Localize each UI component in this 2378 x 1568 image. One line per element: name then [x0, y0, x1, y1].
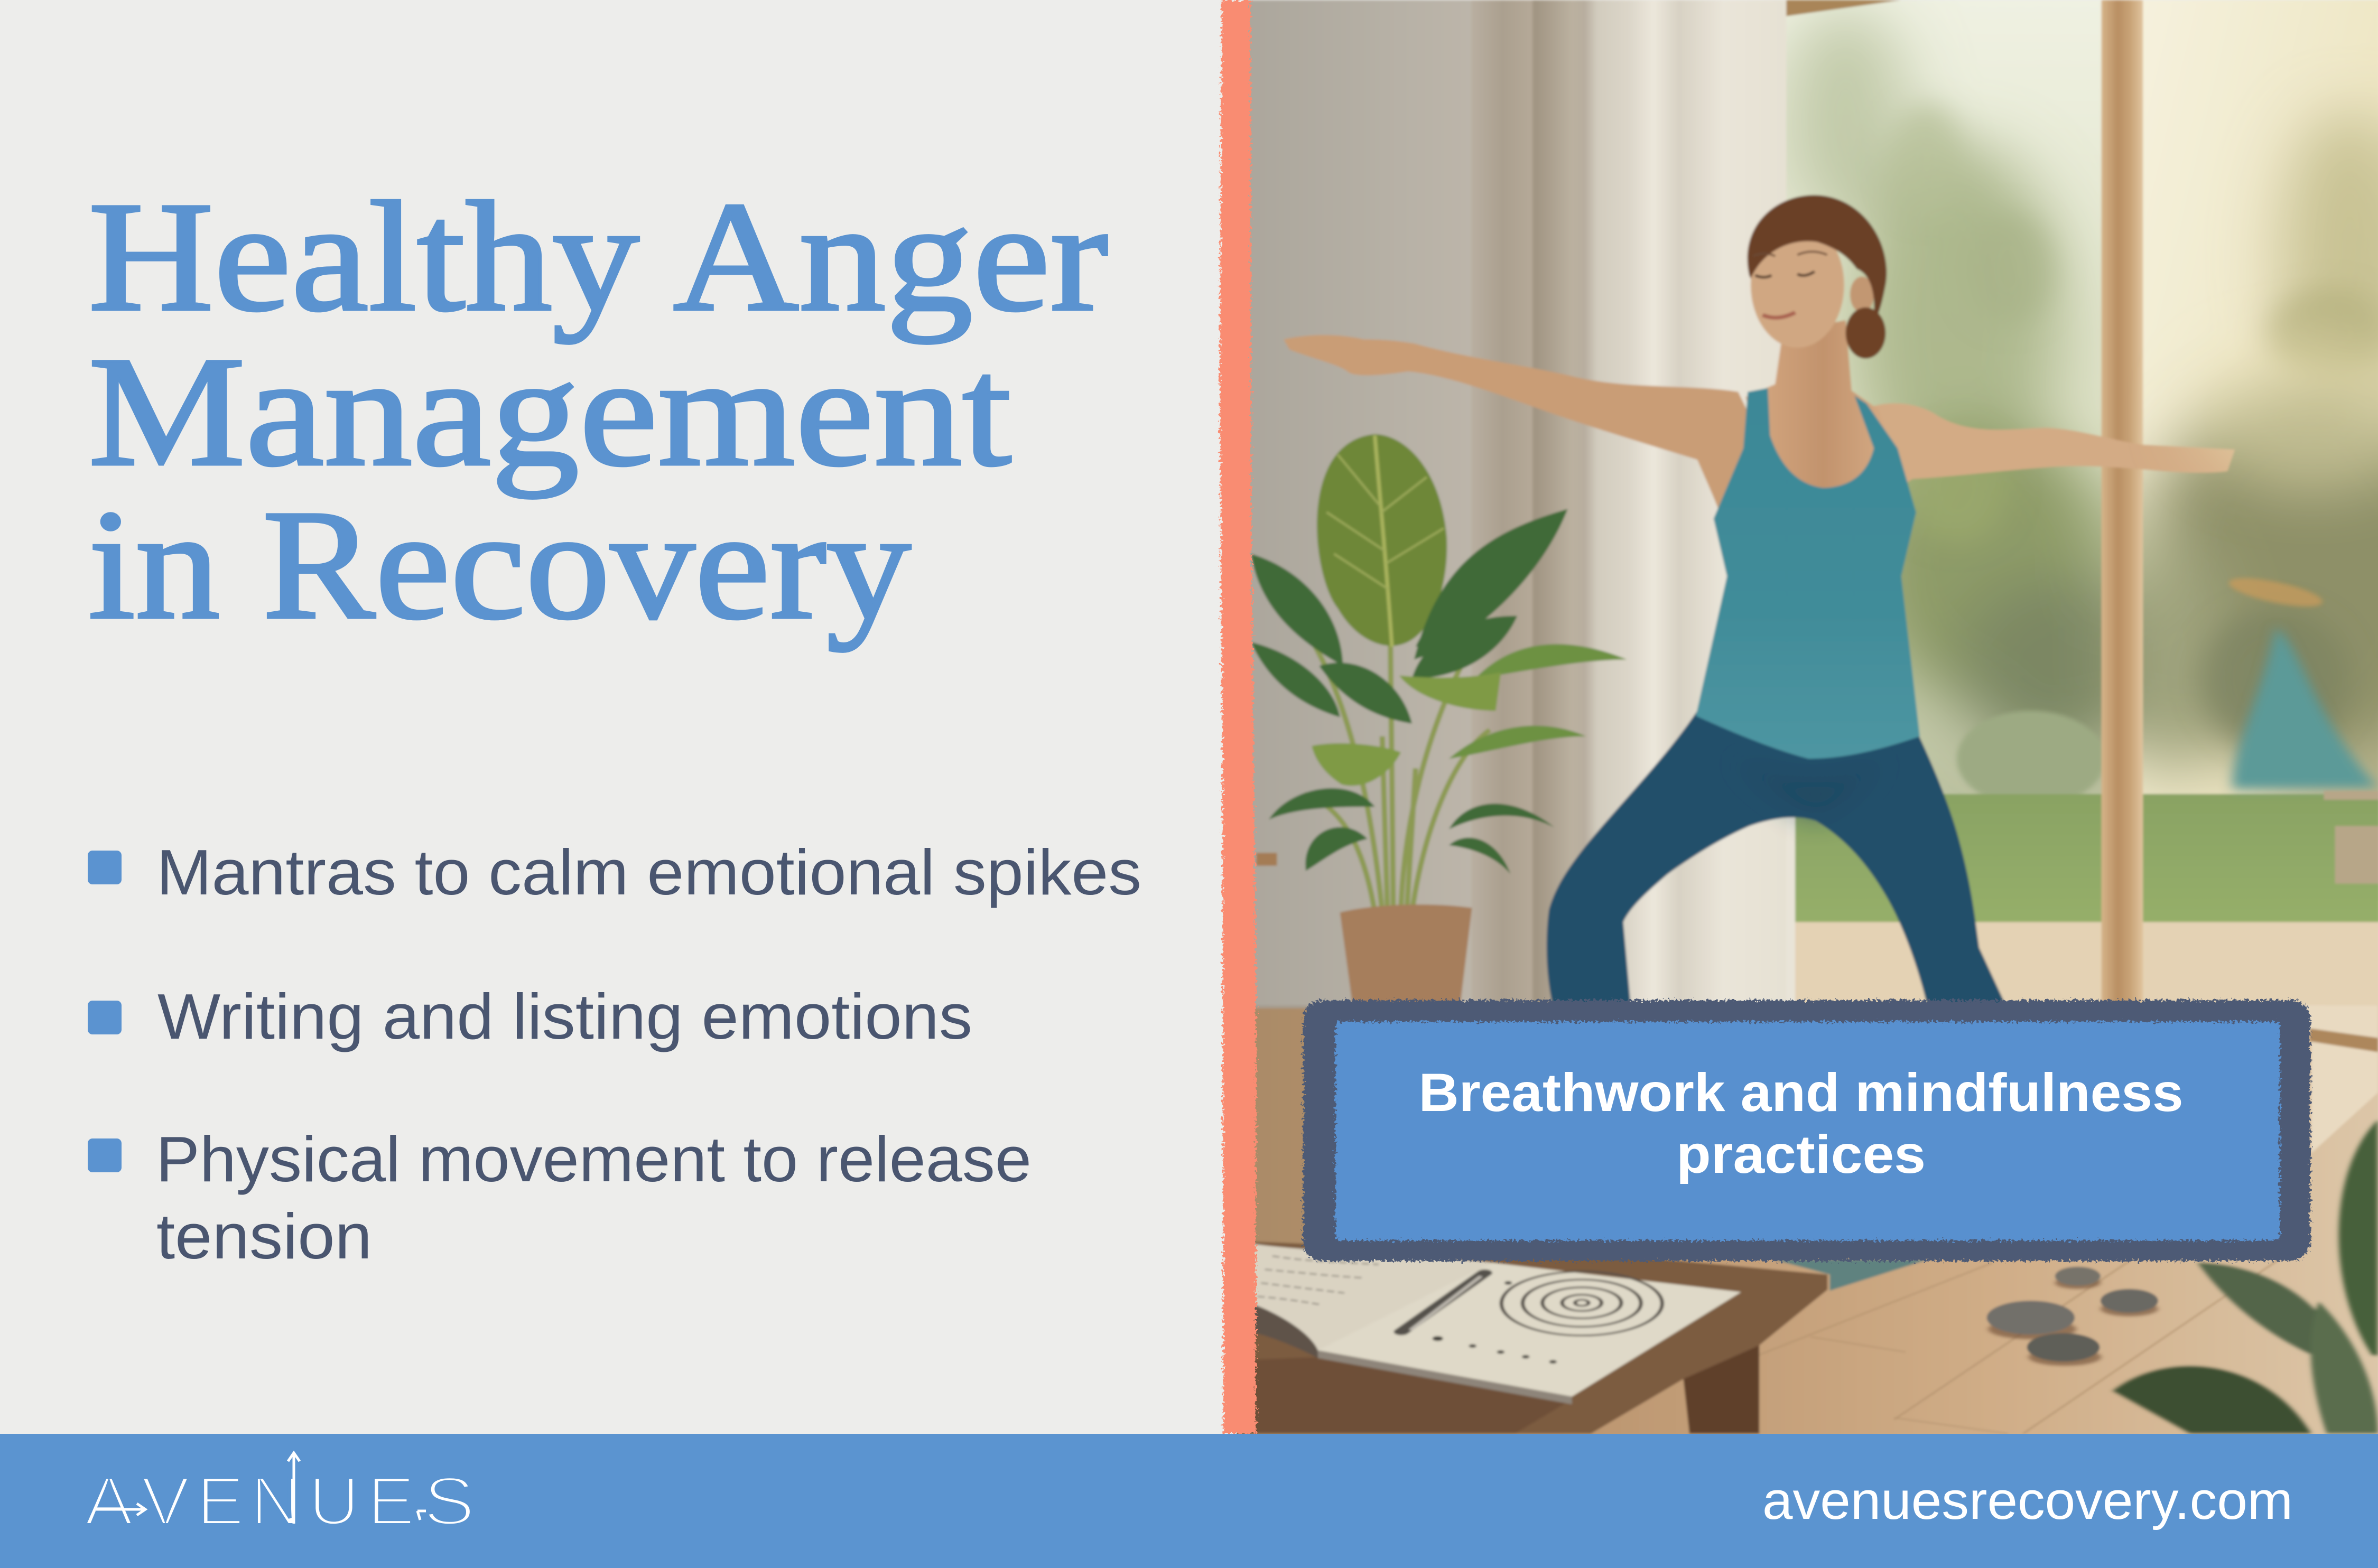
- mid green leaves: [1312, 644, 1627, 786]
- callout text: practices: [1676, 1124, 1926, 1184]
- callout blue panel: [1335, 1022, 2280, 1240]
- wicker pot: [1340, 904, 1472, 1005]
- left arm: [1284, 335, 1753, 512]
- dots: [1433, 1281, 1557, 1364]
- trees outside the window: [1786, 6, 2378, 781]
- right arm: [1872, 404, 2235, 487]
- window glow: [2194, 339, 2378, 493]
- stones: [1987, 1267, 2158, 1366]
- table: [1234, 1241, 1827, 1434]
- logo: AVENUES: U: [309, 1462, 359, 1539]
- title: Management: [88, 324, 1012, 499]
- stems: [1304, 640, 1490, 912]
- bullet 2: Writing and listing emotions: [157, 981, 972, 1052]
- yoga mat edge: [1773, 1259, 1928, 1291]
- garden bench: [2324, 791, 2378, 884]
- bullet 3: [88, 1123, 1032, 1272]
- logo arrows: [96, 1453, 426, 1524]
- hair bun: [1846, 307, 1885, 359]
- logo: AVENUES: E: [197, 1462, 244, 1539]
- window top beam: [1782, 0, 1901, 17]
- window left pane: [1779, 0, 2105, 1005]
- logo: AVENUES: [85, 1453, 475, 1539]
- neck and chest: [1745, 320, 1901, 493]
- hair: [1748, 195, 1887, 320]
- leggings shadow: [1734, 755, 1883, 821]
- terrace: [1794, 922, 2378, 1005]
- ear: [1850, 277, 1874, 312]
- logo: AVENUES: N: [250, 1462, 301, 1539]
- bullet 3: tension: [156, 1200, 372, 1272]
- curtains: [1471, 0, 1786, 1005]
- upper room: [1245, 0, 2378, 1005]
- photo: woman doing yoga by a window: [1234, 0, 2378, 1436]
- title: [88, 170, 1108, 652]
- target circles: [1501, 1272, 1662, 1336]
- window frame: [2102, 0, 2143, 1005]
- callout dark border: [1303, 1000, 2310, 1261]
- blue garden sculpture: [2233, 628, 2378, 789]
- head: [1751, 222, 1844, 348]
- window frame bottom corner: [2310, 1029, 2378, 1052]
- lawn: [1794, 794, 2378, 933]
- wall: [1245, 0, 1482, 1005]
- footer bar: [0, 1434, 2378, 1568]
- handwriting on left page: [1257, 1256, 1379, 1305]
- title: in Recovery: [88, 478, 911, 652]
- pen: [1401, 1273, 1485, 1332]
- logo: AVENUES: S: [423, 1462, 475, 1539]
- bright terrace floor: [1796, 951, 2378, 1153]
- woman: [1284, 195, 2235, 1005]
- teal tank top: [1696, 388, 1920, 759]
- foreground plant: [2113, 1119, 2378, 1434]
- tree foliage patches: [1890, 102, 2378, 749]
- bullet list: [88, 836, 1141, 1272]
- logo: AVENUES: A: [85, 1462, 133, 1539]
- closed eyes and mouth: [1753, 251, 1827, 318]
- logo: AVENUES: E: [367, 1462, 415, 1539]
- window right pane: [2142, 0, 2378, 1005]
- logo: AVENUES: V: [141, 1462, 190, 1539]
- wall bottom: [1234, 951, 1344, 1008]
- shrub: [1957, 711, 2105, 807]
- salmon edge strip: [1220, 0, 1256, 1434]
- website url: avenuesrecovery.com: [1762, 1471, 2293, 1530]
- left panel background: [0, 0, 1237, 1434]
- callout text: Breathwork and mindfulness: [1418, 1062, 2184, 1123]
- large leaf: [1317, 434, 1447, 646]
- dark leaves: [1251, 509, 1567, 874]
- bullet 1: Mantras to calm emotional spikes: [156, 836, 1141, 908]
- bullet 3: Physical movement to release: [156, 1123, 1032, 1195]
- leggings: [1547, 711, 2006, 1005]
- small wall shelf: [1256, 853, 1277, 866]
- floor planks: [1758, 1237, 2311, 1434]
- callout: breathwork: [1303, 1000, 2310, 1261]
- lower room: floor, table, notebook, stones: [1237, 1004, 2378, 1434]
- wood floor: [1237, 1005, 2378, 1434]
- potted plant: [1251, 434, 1627, 1005]
- callout text: [1418, 1062, 2184, 1184]
- title: Healthy Anger: [88, 170, 1108, 344]
- open notebook: [1234, 1241, 1741, 1404]
